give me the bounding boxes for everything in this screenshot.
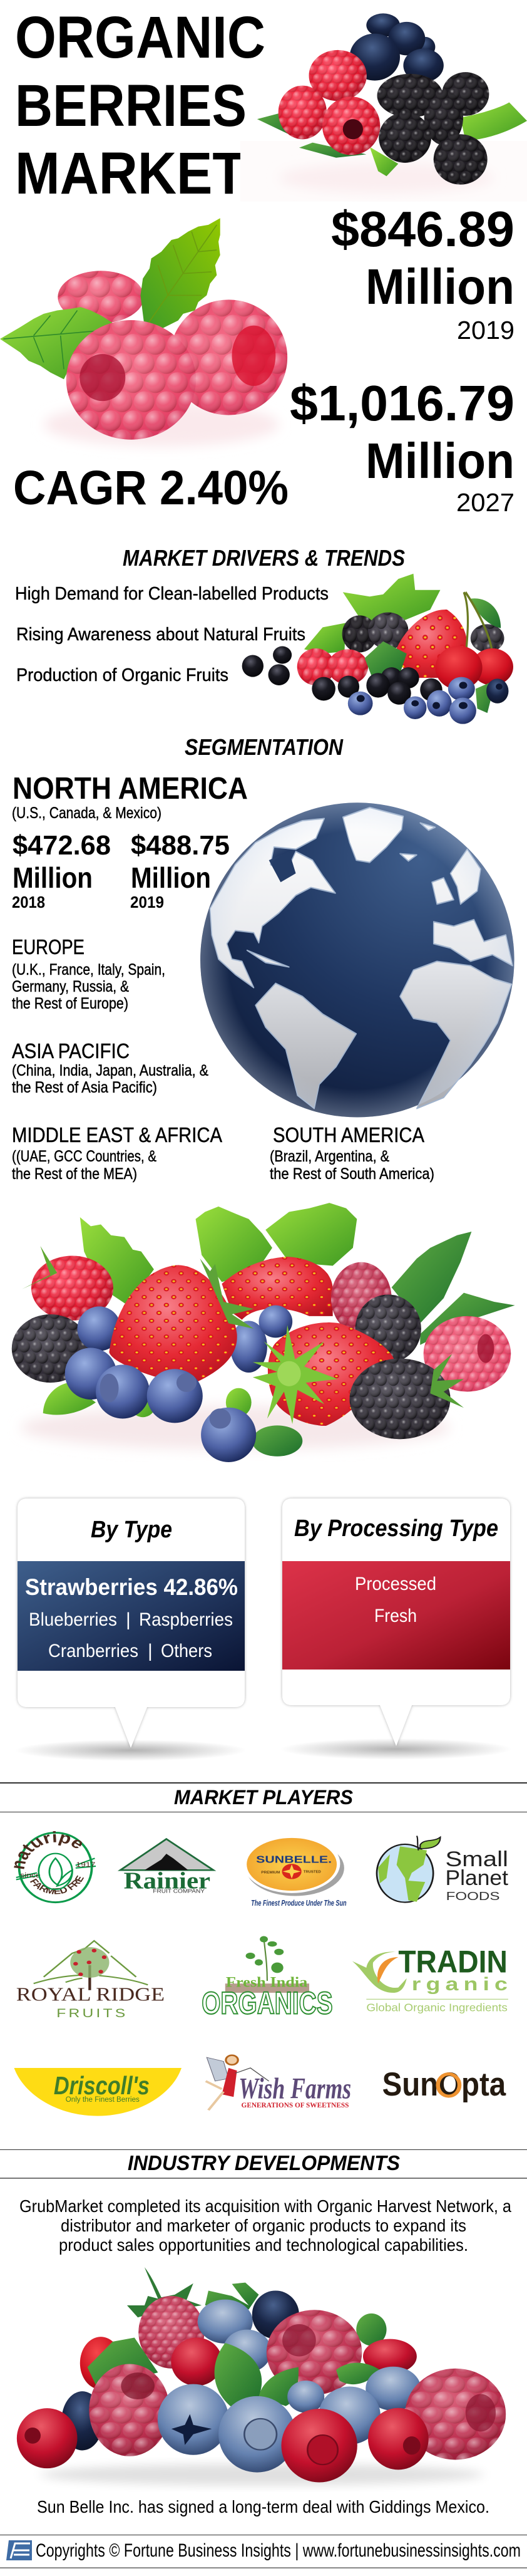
logo: Small Planet Foods (377, 1836, 508, 1903)
illustration: berries and leaves (12, 1203, 515, 1462)
panel: by type (15, 1498, 247, 1761)
illustration: globe (200, 802, 514, 1118)
region: North America (12, 772, 248, 911)
logo: SunBelle: TRUSTED (304, 1870, 321, 1874)
region: Asia Pacific: the Rest of Asia Pacific) (12, 1079, 157, 1096)
text: GrubMarket development: distributor and marketer of organic products to expand its (61, 2216, 466, 2235)
icon: Fortune Business Insights logo (6, 2540, 32, 2560)
heading: market players: MARKET PLAYERS (174, 1786, 354, 1809)
leaf upper (140, 218, 220, 331)
logo: Fresh India Organics: Fresh India (226, 1974, 308, 1990)
region: Middle East and Africa (12, 1123, 222, 1183)
region: North America: Million (13, 861, 93, 894)
stat: 2027 market value: $1,016.79 (290, 375, 514, 431)
heading: industry developments: INDUSTRY DEVELOPMENTS (128, 2151, 400, 2174)
panel: by processing type: By Processing Type (294, 1515, 498, 1542)
region: North America: Million (131, 861, 211, 894)
logo: Rainier: Rainier (124, 1868, 210, 1894)
panel: by type: Raspberries (139, 1609, 233, 1630)
region: South America: (Brazil, Argentina, & (270, 1148, 389, 1165)
list: market drivers (15, 584, 329, 685)
region: South America: the Rest of South America) (270, 1165, 434, 1183)
logo: SunBelle: SUNBELLE. (256, 1854, 332, 1865)
region: North America: $488.75 (131, 830, 230, 861)
region: Europe: (U.K., France, Italy, Spain, (12, 961, 165, 979)
illustration: mixed berries top right (240, 13, 527, 201)
region: Europe (12, 935, 165, 1012)
shadow under card (280, 1738, 512, 1760)
title: BERRIES (15, 73, 247, 139)
logo: Wish Farms: GENERATIONS OF SWEETNESS (242, 2101, 349, 2109)
logo: Royal Ridge Fruits: FRUITS (56, 2007, 125, 2020)
logos: market players (14, 1831, 508, 2116)
list: market drivers: High Demand for Clean-labelled Products (15, 584, 329, 604)
illustration: berry pile (17, 2267, 506, 2485)
region: South America (270, 1123, 434, 1183)
region: Middle East and Africa: MIDDLE EAST & AFRICA (12, 1123, 222, 1146)
heading: segmentation: SEGMENTATION (185, 734, 344, 760)
title (15, 4, 265, 207)
list: market drivers: Rising Awareness about Natural Fruits (16, 625, 305, 645)
logo: Driscoll's: Driscoll's (54, 2071, 150, 2100)
logo: SunBelle: The Finest Produce Under The Sun (251, 1899, 347, 1908)
stat: 2027 market value (290, 375, 514, 517)
region: Asia Pacific: (China, India, Japan, Australia, & (12, 1062, 208, 1079)
illustration: fruit cluster (242, 574, 513, 724)
region: North America: NORTH AMERICA (13, 772, 248, 806)
region: South America: SOUTH AMERICA (273, 1123, 424, 1146)
logo: Royal Ridge Fruits: ROYAL RIDGE (16, 1984, 165, 2005)
panel: by type: By Type (91, 1517, 172, 1543)
footer (0, 2535, 527, 2568)
stat: CAGR: CAGR 2.40% (13, 461, 289, 515)
logo: Driscoll's: Only the Finest Berries (66, 2095, 140, 2103)
stat: 2027 market value: 2027 (456, 488, 514, 517)
logo: Rainier (120, 1839, 213, 1894)
logo: naturipe: naturipe (14, 1831, 82, 1869)
stat: 2019 market value: 2019 (457, 316, 514, 345)
region: North America: 2018 (12, 893, 45, 911)
text: GrubMarket development: product sales opportunities and technological capabilities. (59, 2235, 468, 2255)
stat: 2019 market value (331, 201, 514, 345)
panel: by type: Cranberries (48, 1641, 138, 1661)
region: North America: 2019 (130, 893, 164, 911)
region: Europe: Germany, Russia, & (12, 978, 129, 995)
stat: 2019 market value: Million (366, 259, 514, 314)
logo: Small Planet Foods: Planet (446, 1866, 508, 1890)
text: Sun Belle development: Sun Belle Inc. has signed a long-term deal with Giddings Mexico. (37, 2497, 489, 2516)
panel: by type: Blueberries (29, 1609, 117, 1630)
region: Europe: EUROPE (12, 935, 84, 958)
list: market drivers: Production of Organic Fruits (16, 665, 228, 685)
logo: Small Planet Foods: Small (446, 1847, 508, 1871)
logo: Royal Ridge Fruits (16, 1941, 165, 2020)
logo: Fresh India Organics (202, 1936, 333, 2021)
panel: by type: Strawberries 42.86% (25, 1574, 238, 1600)
logo: SunBelle (243, 1834, 347, 1908)
logo: naturipe: 1917 (76, 1861, 95, 1869)
logo: Wish Farms (206, 2055, 351, 2110)
logo: Tradin Organic (352, 1945, 508, 2014)
logo: naturipe (14, 1831, 96, 1903)
panel: by processing type (280, 1498, 512, 1760)
heading: market drivers and trends: MARKET DRIVERS & TRENDS (123, 545, 405, 571)
title: ORGANIC (15, 4, 265, 71)
panel: by type: | (126, 1609, 131, 1630)
logo: Driscoll's (14, 2068, 182, 2116)
logo: naturipe: since (20, 1871, 41, 1879)
text: GrubMarket development (19, 2196, 511, 2255)
illustration: raspberries with leaves (0, 218, 287, 446)
shadow under card (15, 1740, 247, 1761)
title: MARKET (15, 140, 245, 207)
region: Asia Pacific (12, 1039, 208, 1096)
logo: SunBelle: PREMIUM (261, 1871, 280, 1874)
region: Middle East and Africa: ((UAE, GCC Countries, & (12, 1148, 156, 1165)
stat: 2027 market value: Million (366, 433, 514, 489)
panel: by type: | (148, 1641, 153, 1661)
logo: Wish Farms: Wish Farms (238, 2072, 351, 2105)
logo: Fresh India Organics: ORGANICS (202, 1986, 333, 2021)
region: North America: (U.S., Canada, & Mexico) (12, 804, 161, 822)
region: Europe: the Rest of Europe) (12, 995, 128, 1012)
region: North America: $472.68 (13, 830, 111, 861)
region: Middle East and Africa: the Rest of the MEA) (12, 1165, 137, 1183)
panel: by processing type: Fresh (374, 1606, 417, 1626)
logo: Tradin Organic: rganic (412, 1974, 508, 1995)
stat: 2019 market value: $846.89 (331, 201, 514, 257)
panel: by processing type: Processed (355, 1574, 436, 1594)
panel: by type: Others (161, 1641, 212, 1661)
logo: Small Planet Foods: FOODS (446, 1890, 500, 1903)
leaf left (0, 307, 115, 379)
logo: Rainier: FRUIT COMPANY (153, 1888, 205, 1894)
region: Asia Pacific: ASIA PACIFIC (12, 1039, 130, 1062)
